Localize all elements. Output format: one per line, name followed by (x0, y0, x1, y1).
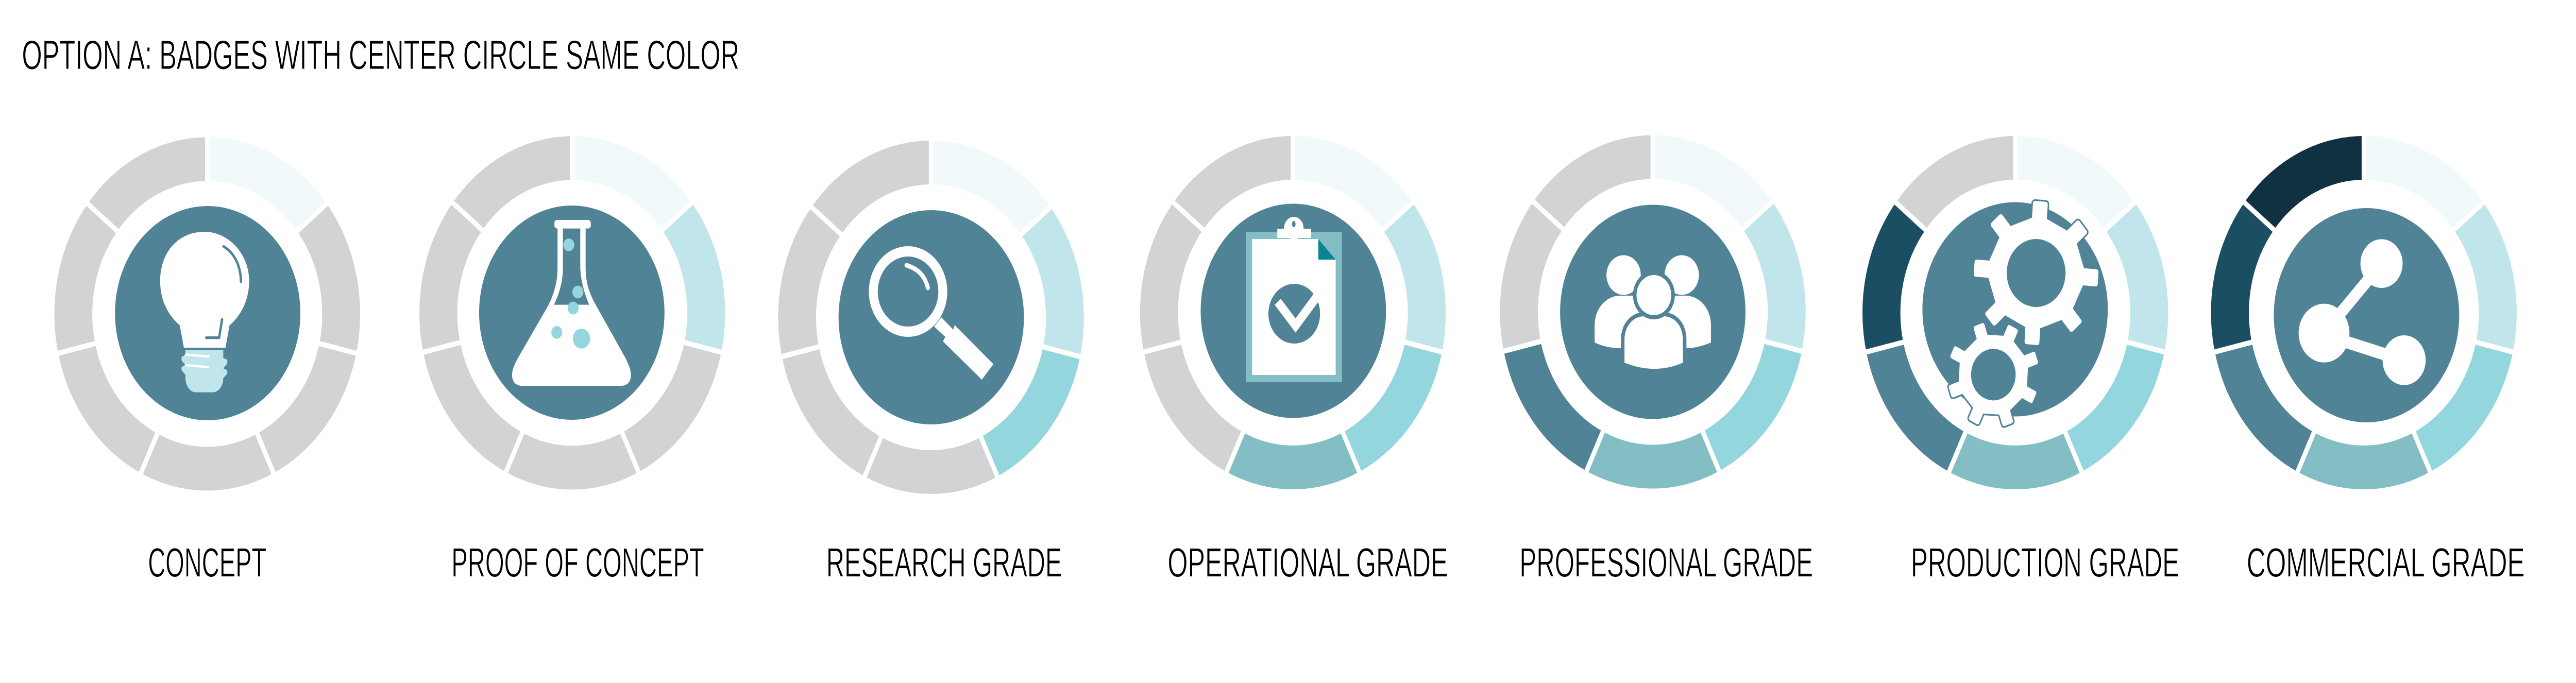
progress ring: 1 of 7 (51, 129, 364, 490)
center circle (479, 206, 665, 420)
progress ring: 4 of 7 (1137, 127, 1449, 489)
badge: professional grade (1496, 127, 1813, 586)
progress ring: 6 of 7 (1859, 127, 2172, 489)
center circle (1560, 205, 1745, 419)
center circle (115, 206, 300, 420)
icon: light bulb (160, 232, 249, 392)
center circle (1200, 204, 1386, 418)
center circle (1922, 202, 2108, 416)
badge: research grade (774, 132, 1088, 586)
label: PROFESSIONAL GRADE (1519, 539, 1813, 586)
label: CONCEPT (148, 539, 266, 586)
progress ring: 2 of 7 (416, 128, 728, 489)
icon: clipboard with check (1246, 217, 1342, 382)
badge: operational grade (1137, 127, 1449, 586)
title: OPTION A: BADGES WITH CENTER CIRCLE SAME COLOR (22, 31, 739, 78)
icon: magnifying glass (873, 251, 993, 380)
label: PROOF OF CONCEPT (451, 539, 704, 586)
icon: group of people (1595, 255, 1711, 369)
center circle (839, 210, 1024, 424)
label: PRODUCTION GRADE (1911, 539, 2179, 586)
badge: proof of concept (416, 128, 728, 586)
icon: share network (2299, 239, 2426, 385)
progress ring: 5 of 7 (1496, 127, 1809, 488)
progress ring: 7 of 7 (2208, 127, 2520, 489)
badge: commercial grade (2208, 127, 2525, 586)
icon: flask (512, 220, 631, 386)
icon: gears (1932, 196, 2103, 446)
center circle (2274, 208, 2459, 422)
progress ring: 3 of 7 (774, 132, 1088, 494)
badge: concept (51, 129, 364, 586)
badge: production grade (1859, 127, 2179, 586)
label: RESEARCH GRADE (826, 539, 1062, 586)
label: OPERATIONAL GRADE (1167, 539, 1448, 586)
